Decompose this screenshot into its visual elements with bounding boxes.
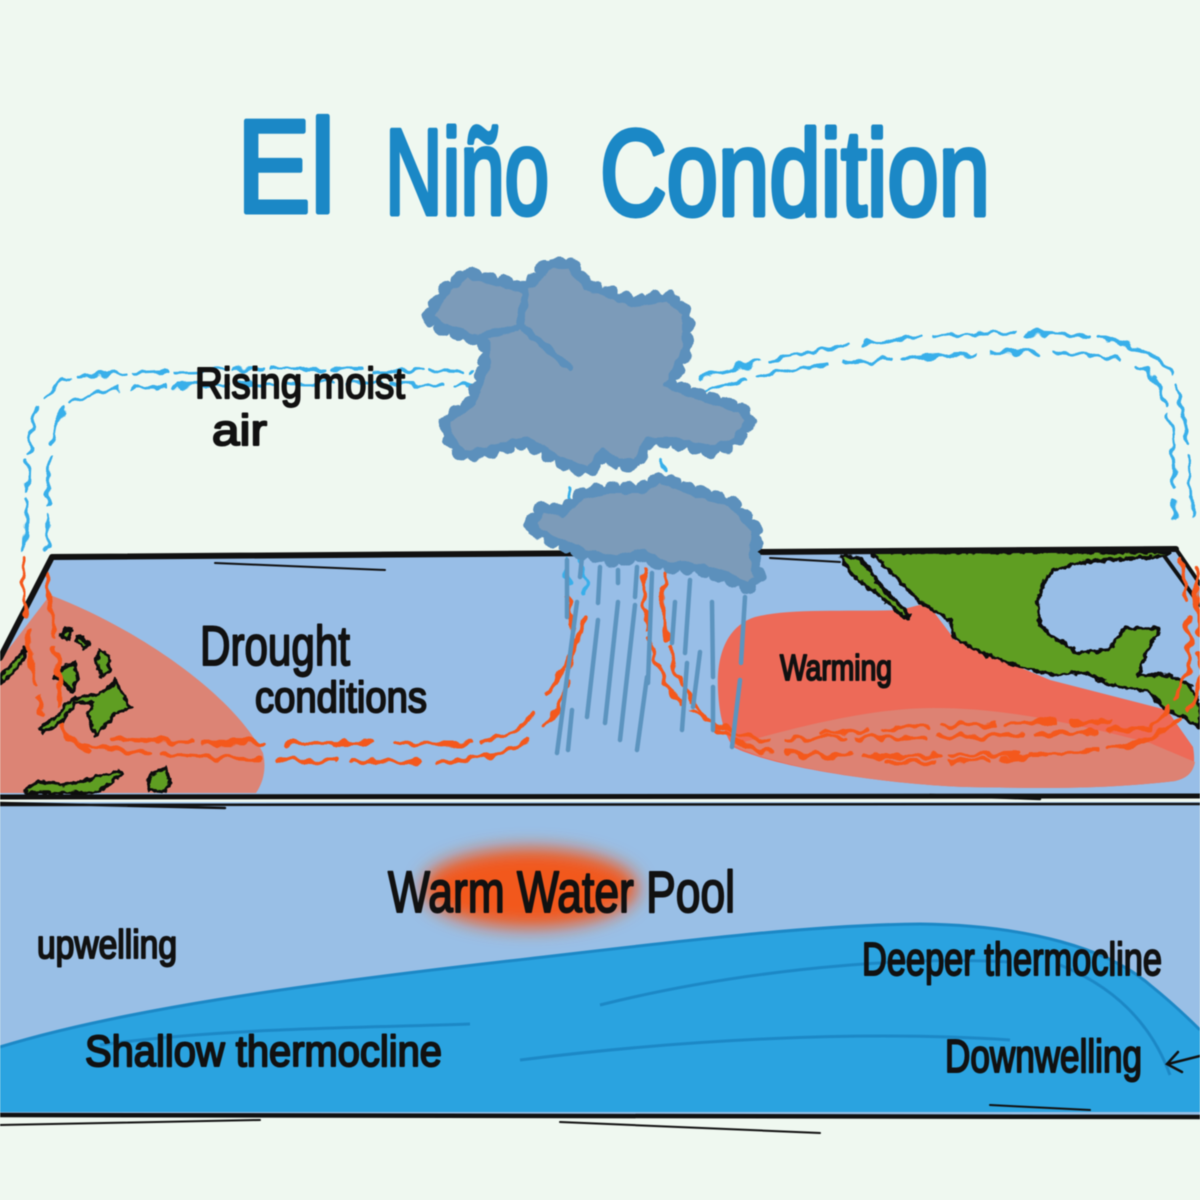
landmass: Mexico and Central America [840,552,1200,727]
title: Niño [385,104,549,240]
label: Drought conditions [200,614,427,722]
label: Rising moist air: Rising moist [195,359,405,408]
storm cloud: lower [532,479,758,586]
rain [557,557,745,753]
panel: ocean surface map [0,549,1200,796]
label: Warming: Warming [780,647,892,688]
sketched box outlines [0,549,1200,1133]
label: Rising moist air: air [212,406,267,455]
title [237,93,990,241]
storm cloud: upper [430,264,750,471]
deep cold water layer [0,924,1200,1112]
label: Drought conditions: conditions [255,673,427,722]
landmass: Southeast Asia islands [0,630,170,793]
warm surface current [24,560,1200,763]
warming region [718,603,1195,788]
title: Condition [600,105,990,241]
warm water pool [422,848,638,928]
drought region [0,595,264,793]
label: Downwelling: Downwelling [945,1030,1142,1082]
label: Warm Water Pool: Warm Water Pool [388,860,735,925]
label: Rising moist air [195,359,405,455]
panel: ocean cross-section [0,802,1200,1115]
label: Shallow thermocline: Shallow thermocline [85,1027,442,1076]
arrow: downwelling [1167,1052,1200,1072]
rising moist air circulation [24,333,1192,590]
label: Drought conditions: Drought [200,614,350,677]
title: El [237,93,335,240]
label: upwelling: upwelling [37,923,177,967]
